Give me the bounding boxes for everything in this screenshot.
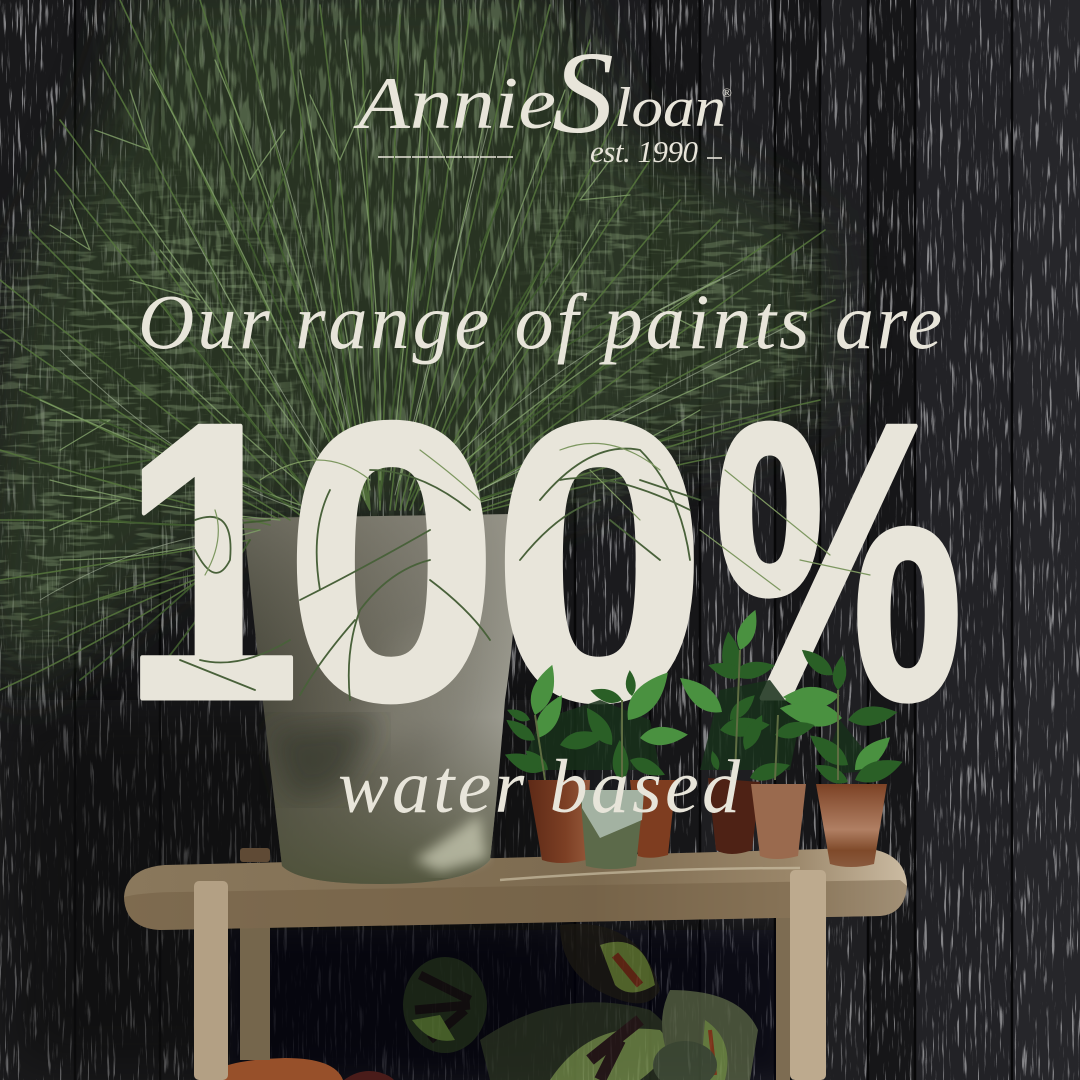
big number: 100%: 0 (492, 340, 707, 782)
begonia plant under the shelf (403, 924, 758, 1080)
logo: Annie Sloan est. 1990 (352, 27, 732, 169)
headline: our range of paints are: Our range of paints are (138, 278, 942, 365)
established date: est. 1990 (590, 134, 698, 169)
big number: 100%: 1 (122, 342, 300, 783)
logo wordmark: Annie (352, 63, 556, 145)
front left leg (194, 881, 228, 1080)
plant: dense sideways strands (0, 152, 852, 672)
front right leg (790, 870, 826, 1080)
rear left leg (240, 925, 270, 1060)
logo: Annie Sloan est. 1990: S (552, 27, 614, 158)
rear peg (240, 848, 270, 862)
big number: 100%: % (714, 341, 963, 782)
wooden shelf table (124, 848, 907, 1080)
large concrete pot (243, 514, 516, 884)
logo: Annie Sloan est. 1990: loan (614, 77, 726, 139)
plant: branches over the number (180, 443, 870, 700)
dark foliage mass (520, 680, 880, 775)
plant: dense upright strands (108, 0, 646, 516)
big number: 100% (122, 340, 963, 783)
big number: 100%: 0 (284, 340, 499, 782)
front face shading (124, 880, 907, 930)
subheading: water based: water based (338, 745, 741, 829)
seedlings (502, 607, 906, 789)
table top (124, 848, 907, 930)
rear right leg (776, 915, 790, 1080)
small pots on the shelf (528, 778, 887, 869)
plant: fine grass strands (0, 0, 835, 690)
plant: soft foliage mass (0, 0, 830, 690)
terracotta pot, bottom edge (205, 1058, 394, 1080)
registered mark: ® (722, 85, 732, 100)
